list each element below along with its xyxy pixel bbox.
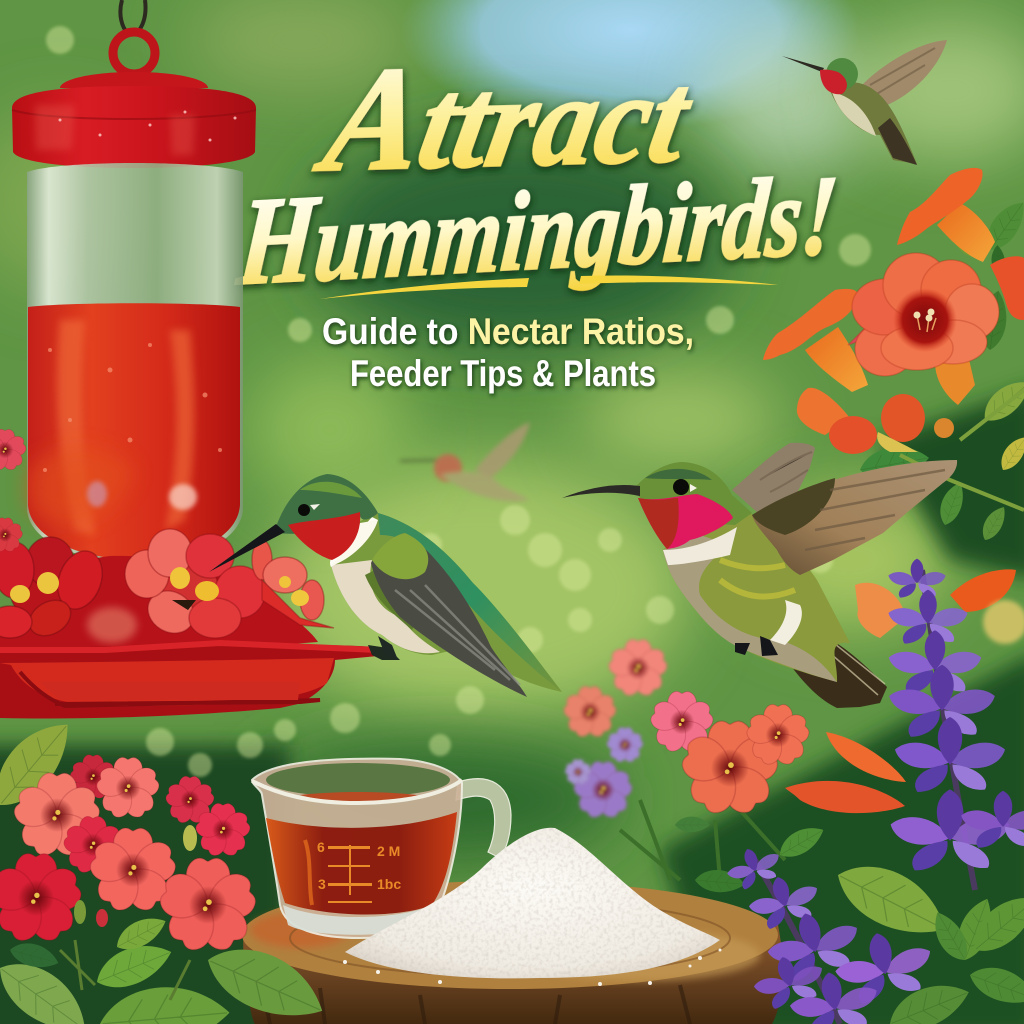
- belly: [663, 535, 837, 682]
- port flower left: [0, 537, 110, 643]
- cup markings: 2 M: [377, 843, 400, 859]
- mid-garden pink and orange flowers: [562, 569, 1024, 894]
- trumpet flowers top right: [763, 168, 1024, 454]
- body: [331, 513, 562, 692]
- cup markings: 6: [317, 839, 325, 855]
- purple salvia spike, bottom: [722, 840, 938, 1024]
- body: [663, 511, 850, 682]
- title line: Hummingbirds!: Hummingbirds!: [233, 142, 843, 311]
- cup markings: [317, 839, 401, 903]
- wooden stump: [242, 881, 783, 1024]
- feet: [735, 636, 778, 656]
- purple salvia spike, right: [827, 559, 1024, 1024]
- feeder glass jar: [27, 163, 243, 562]
- cup handle: [456, 779, 511, 858]
- right edge flowers: [990, 256, 1024, 320]
- top trumpet: [897, 168, 995, 262]
- collar: [330, 517, 378, 567]
- beak: [209, 524, 285, 572]
- left hummingbird: [209, 474, 562, 697]
- subtitle line 1: Guide to Nectar Ratios,: [322, 311, 694, 352]
- foot: [378, 636, 398, 660]
- measuring cup with nectar: [252, 759, 511, 938]
- subtitle line 2: Feeder Tips & Plants: [350, 353, 656, 394]
- sugar pile: [340, 820, 725, 986]
- head: [276, 474, 378, 534]
- title line: Attract: Attract: [306, 29, 706, 203]
- cup markings: 1bc: [377, 876, 401, 892]
- feeder cap: [12, 72, 256, 168]
- title underline swoosh: [320, 275, 778, 299]
- small hummingbird top right: [782, 40, 947, 165]
- feeder chain and ring: [113, 0, 155, 74]
- subtitle: [322, 311, 694, 394]
- feeder flower ports: [0, 429, 334, 643]
- distant blurred hummingbird: [400, 422, 530, 501]
- right hummingbird: [562, 443, 957, 708]
- nectar fill: [266, 812, 457, 915]
- feeder tray: [0, 643, 400, 719]
- cup markings: 3: [318, 876, 326, 892]
- port flower right: [252, 540, 334, 628]
- tail: [788, 630, 887, 708]
- title: [233, 29, 843, 311]
- mantle: [378, 513, 562, 692]
- beak: [562, 485, 640, 498]
- nectar in jar: [28, 303, 240, 560]
- throat: [638, 494, 733, 549]
- feeder: [0, 0, 400, 719]
- far wing: [732, 443, 815, 512]
- belly: [331, 560, 440, 653]
- big trumpet flower: [848, 253, 999, 376]
- head: [633, 462, 752, 525]
- cup rim: [252, 780, 462, 803]
- feeder base dome: [0, 556, 318, 665]
- near wing: [752, 460, 957, 575]
- gorget: [288, 512, 360, 560]
- left trumpet: [763, 289, 868, 392]
- port flower center: [125, 529, 265, 641]
- cup body: [252, 759, 462, 938]
- lower buds: [797, 388, 850, 435]
- bottom-left flowers and leaves: [0, 708, 334, 1024]
- wing: [371, 533, 527, 697]
- plants: right-side foliage: [857, 194, 1024, 544]
